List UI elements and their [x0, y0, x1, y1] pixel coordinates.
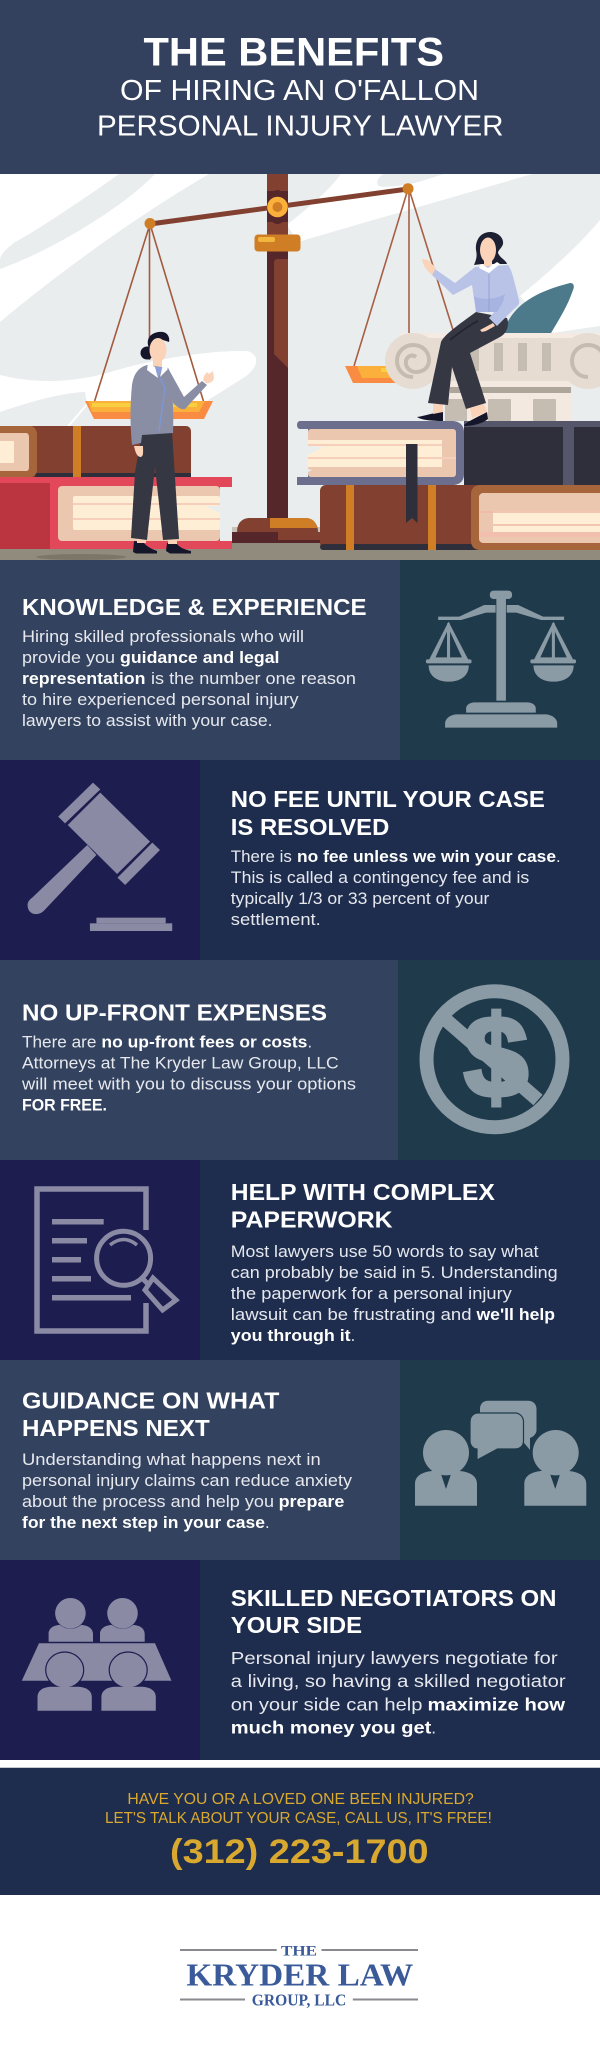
body text: There is	[231, 848, 292, 866]
column capital	[385, 333, 600, 421]
panel: no up-front expenses	[0, 960, 600, 1160]
body text	[231, 848, 561, 929]
body text: can probably be said in 5. Understanding	[231, 1264, 558, 1282]
illustration: scales of justice with lawyers and books	[0, 174, 600, 560]
heading: PAPERWORK	[231, 1207, 393, 1233]
logo: The Kryder Law Group: THE	[281, 1944, 317, 1960]
body text	[231, 1243, 558, 1345]
body text: you through it	[231, 1327, 351, 1345]
body text: There are	[22, 1034, 96, 1052]
heading: SKILLED NEGOTIATORS ON	[231, 1585, 557, 1611]
heading: HAPPENS NEXT	[22, 1415, 210, 1441]
body text: .	[556, 848, 561, 866]
body text: no up-front fees or costs	[101, 1034, 307, 1052]
title	[97, 30, 503, 142]
right scale pan and strings	[345, 189, 453, 383]
logo: The Kryder Law Group: GROUP, LLC	[252, 1991, 346, 2010]
books: left stack	[0, 426, 232, 549]
icon: gavel	[28, 783, 172, 931]
title: PERSONAL INJURY LAWYER	[97, 110, 503, 142]
body text: is the number one reason	[151, 670, 356, 688]
title: THE BENEFITS	[144, 30, 444, 74]
body text: maximize how	[428, 1694, 565, 1714]
body text: guidance and legal	[120, 649, 280, 667]
title: OF HIRING AN O'FALLON	[120, 75, 479, 107]
icon: scales	[426, 591, 576, 728]
body text: FOR FREE.	[22, 1097, 107, 1115]
heading: HELP WITH COMPLEX	[231, 1179, 495, 1205]
body text: representation	[22, 670, 146, 688]
call to action band	[0, 1767, 600, 1895]
call to action text: HAVE YOU OR A LOVED ONE BEEN INJURED?	[127, 1791, 474, 1808]
scale pole and beam	[144, 174, 414, 543]
body text: lawsuit can be frustrating and	[231, 1306, 472, 1324]
logo: The Kryder Law Group: KRYDER LAW	[186, 1957, 413, 1993]
scale strings and left pan	[85, 224, 213, 419]
body text: we'll help	[475, 1306, 555, 1324]
body text: personal injury claims can reduce anxiety	[22, 1472, 353, 1490]
body text: .	[265, 1514, 270, 1532]
body text: .	[308, 1034, 312, 1052]
panel: help with complex paperwork	[0, 1160, 600, 1360]
body text: a living, so having a skilled negotiator	[231, 1671, 566, 1691]
body text: .	[351, 1327, 355, 1345]
body text: This is called a contingency fee and is	[231, 869, 529, 887]
body text: prepare	[279, 1493, 344, 1511]
heading: IS RESOLVED	[231, 814, 389, 840]
panel: no fee until resolved	[0, 760, 600, 960]
logo: The Kryder Law Group	[180, 1944, 418, 2010]
leaf	[503, 283, 574, 333]
body text: lawyers to assist with your case.	[22, 712, 272, 730]
body text: Hiring skilled professionals who will	[22, 628, 304, 646]
panel: skilled negotiators	[0, 1560, 600, 1760]
body text: .	[431, 1717, 436, 1737]
heading: GUIDANCE ON WHAT	[22, 1388, 279, 1414]
icon: negotiation table	[22, 1598, 171, 1711]
body text: typically 1/3 or 33 percent of your	[231, 890, 490, 908]
body text: Personal injury lawyers negotiate for	[231, 1648, 558, 1668]
icon: no dollar sign: $	[464, 992, 528, 1122]
body text: Attorneys at The Kryder Law Group, LLC	[22, 1055, 339, 1073]
icon: no dollar sign	[426, 991, 562, 1127]
body text: Understanding what happens next in	[22, 1451, 321, 1469]
heading	[231, 786, 545, 840]
body text: on your side can help	[231, 1694, 422, 1714]
body text: for the next step in your case	[22, 1514, 265, 1532]
call to action text: LET'S TALK ABOUT YOUR CASE, CALL US, IT'S FREE!	[105, 1810, 492, 1827]
phone number: (312) 223-1700	[170, 1833, 429, 1871]
heading: YOUR SIDE	[231, 1612, 362, 1638]
figure: standing lawyer	[130, 332, 214, 554]
heading: KNOWLEDGE & EXPERIENCE	[22, 594, 366, 620]
body text	[21, 1034, 356, 1115]
panel: knowledge and experience	[0, 560, 600, 760]
books: right stack	[297, 421, 600, 550]
heading	[231, 1585, 557, 1638]
header band	[0, 0, 600, 174]
figure: seated lawyer	[417, 232, 519, 426]
icon: two people talking	[415, 1401, 586, 1506]
icon: document with magnifier	[37, 1189, 176, 1331]
body text: no fee unless we win your case	[297, 848, 556, 866]
body text: settlement.	[231, 911, 321, 929]
heading	[22, 1388, 279, 1441]
body text: Most lawyers use 50 words to say what	[231, 1243, 539, 1261]
body text	[22, 1451, 353, 1532]
panel: guidance on what happens next	[0, 1360, 600, 1560]
heading: NO UP-FRONT EXPENSES	[22, 1000, 327, 1026]
heading	[231, 1179, 495, 1233]
body text: the paperwork for a personal injury	[231, 1285, 513, 1303]
body text: about the process and help you	[22, 1493, 274, 1511]
heading: NO FEE UNTIL YOUR CASE	[231, 786, 545, 812]
body text: will meet with you to discuss your options	[21, 1076, 356, 1094]
body text	[231, 1648, 566, 1737]
body text: to hire experienced personal injury	[22, 691, 299, 709]
body text	[22, 628, 356, 730]
body text: provide you	[22, 649, 115, 667]
call to action text	[105, 1791, 492, 1827]
body text: much money you get	[231, 1717, 431, 1737]
